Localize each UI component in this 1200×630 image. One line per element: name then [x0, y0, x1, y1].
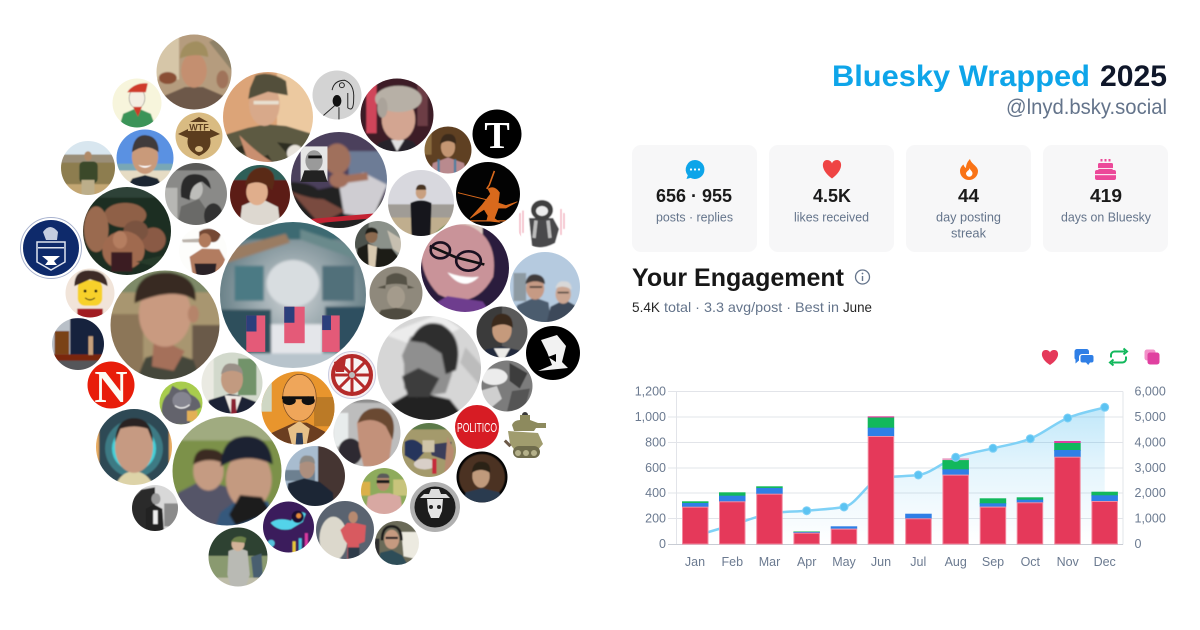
- avatar: person in hat outdoors: [208, 528, 268, 586]
- month labels: [685, 555, 1116, 569]
- panel: streak stat: day posting: [936, 210, 1001, 224]
- avatar: cartoon man with sunglasses: [262, 372, 334, 444]
- month labels: Jun: [871, 555, 891, 569]
- avatar: man in white collared shirt: [476, 306, 528, 358]
- avatar: red wheel emblem: [328, 352, 376, 398]
- panel: likes stat: [769, 145, 894, 252]
- panel: likes stat: 4.5K: [813, 186, 851, 206]
- avatar: man in red t-shirt: [316, 501, 374, 559]
- engagement summary: June: [843, 299, 872, 315]
- panel: streak stat: [906, 145, 1031, 252]
- avatar: pirate ship logo: [526, 326, 580, 380]
- left axis labels: 600: [645, 461, 666, 475]
- engagement chart: [635, 384, 1166, 569]
- panel: days on Bluesky stat: 419: [1090, 186, 1122, 206]
- avatar: red N logo: N: [94, 361, 128, 412]
- avatar: smiling bald man with glasses: [421, 224, 509, 312]
- engagement summary: total · 3.3 avg/post · Best in: [664, 299, 839, 315]
- icon: replies legend bubbles: [1074, 349, 1094, 365]
- left axis labels: 200: [645, 512, 666, 526]
- cumulative area and line: [695, 403, 1109, 544]
- icon: quotes legend squares: [1144, 350, 1160, 364]
- panel: posts and replies stat: 656 · 955: [656, 186, 732, 206]
- month labels: Apr: [797, 555, 816, 569]
- panel: days on Bluesky stat: [1043, 145, 1168, 252]
- icon: heart: [823, 160, 841, 178]
- avatar: stylised portrait with cyan halo: [96, 409, 172, 485]
- month labels: Jul: [910, 555, 926, 569]
- title: 2025: [1100, 60, 1167, 93]
- panel: days on Bluesky stat: days on Bluesky: [1061, 210, 1151, 224]
- panel: streak stat: 44: [958, 186, 979, 206]
- engagement summary: 5.4K: [632, 299, 661, 315]
- avatar: man in dark coat: [355, 221, 401, 267]
- avatar: father and son selfie: [172, 416, 282, 526]
- avatar: WTF smokey bear badge: [176, 112, 222, 160]
- avatar: pilot with headset: [375, 521, 419, 565]
- left axis labels: 400: [645, 486, 666, 500]
- left axis labels: 1,200: [635, 384, 666, 398]
- avatar: aircraft interior with flags: [220, 222, 366, 368]
- month labels: Feb: [722, 555, 743, 569]
- avatar: man in camouflage: [223, 72, 313, 162]
- avatar: monochrome woman in plaid: [165, 163, 227, 225]
- right axis labels: [1134, 384, 1166, 551]
- month labels: May: [832, 555, 857, 569]
- avatar: close-up selfie by window: [334, 400, 400, 466]
- avatar: hand-drawn face sketch: [312, 70, 362, 120]
- icon: speech bubble: [686, 160, 704, 179]
- avatar: sepia man in campaign hat: [370, 266, 422, 320]
- right axis labels: 2,000: [1134, 486, 1166, 500]
- avatar: New York Times logo: [472, 110, 522, 158]
- icon: flame: [960, 159, 978, 180]
- right axis labels: 6,000: [1134, 384, 1166, 398]
- avatar bubble cluster: [20, 27, 587, 592]
- avatar: toddler portrait: [230, 165, 290, 225]
- avatar: man in landscape: [61, 141, 115, 195]
- stacked monthly bars: [682, 416, 1118, 544]
- avatar: neon twitter bird: [263, 502, 314, 552]
- avatar: WTF smokey bear badge: WTF: [189, 122, 209, 132]
- avatar: woman in black top: [182, 228, 226, 275]
- avatar: grey cat on green: [160, 382, 202, 424]
- right axis labels: 0: [1134, 537, 1142, 551]
- avatar: man in plaid shirt: [424, 126, 472, 174]
- avatar: white haired man on TV: [360, 78, 434, 152]
- avatar: monochrome man small: [132, 485, 178, 531]
- avatar: POLITICO logo: POLITICO: [457, 421, 497, 435]
- title: Bluesky Wrapped: [832, 60, 1090, 93]
- dot: August cumulative marker: [952, 453, 960, 461]
- month labels: Jan: [685, 555, 705, 569]
- avatar: monochrome bearded profile: [377, 316, 481, 420]
- avatar: sketch figure with pink strokes: [518, 199, 566, 248]
- avatar: young man looking up: [110, 270, 220, 380]
- avatar: cartoon general: [112, 78, 162, 128]
- avatar: galley rowers: [83, 187, 171, 275]
- avatar: New York Times logo: T: [484, 115, 510, 157]
- right axis labels: 5,000: [1134, 410, 1166, 424]
- avatar: POLITICO logo: [455, 405, 499, 449]
- avatar: rugby scrum: [402, 423, 456, 477]
- avatar: two men under grey sky: [510, 252, 580, 322]
- panel: streak stat: streak: [951, 226, 986, 240]
- right axis labels: 3,000: [1134, 461, 1166, 475]
- avatar: skull and hat patch: [410, 482, 460, 532]
- icon: likes legend heart: [1042, 350, 1058, 365]
- left axis labels: 0: [659, 537, 666, 551]
- month labels: Mar: [759, 555, 780, 569]
- right axis labels: 4,000: [1134, 436, 1166, 450]
- avatar: soldier in tan cap: [156, 34, 232, 110]
- left axis labels: 800: [645, 436, 666, 450]
- avatar: monochrome textured sketch: [482, 360, 532, 412]
- panel: likes stat: likes received: [794, 210, 869, 224]
- avatar: man in suit on the shore: [388, 170, 454, 236]
- panel: posts and replies stat: posts · replies: [656, 210, 733, 224]
- month labels: Sep: [982, 555, 1004, 569]
- icon: reposts legend arrows: [1110, 348, 1127, 366]
- panel: posts and replies stat: [632, 145, 757, 252]
- avatar: Greek vase figure: [456, 162, 520, 226]
- chart legend: [1042, 348, 1160, 366]
- heading: your engagement: Your Engagement: [632, 264, 845, 292]
- avatar: older man in suit: [202, 352, 262, 414]
- handle: @lnyd.bsky.social: [1006, 96, 1167, 119]
- avatar: wrestling scene with old photo: [291, 132, 387, 228]
- avatar: eagle and anvil crest: [20, 218, 82, 278]
- avatar: lego minifigure: [66, 268, 114, 318]
- avatar: man on dark ring background: [456, 452, 508, 502]
- avatar: tiny cartoon tank: [504, 412, 546, 458]
- left axis labels: [635, 384, 666, 551]
- right axis labels: 1,000: [1134, 512, 1166, 526]
- avatar: speaker on stage: [52, 318, 104, 370]
- avatar: man with sunglasses outdoors: [361, 468, 407, 514]
- icon: birthday cake: [1095, 159, 1116, 180]
- avatar: diver at beach: [116, 130, 174, 186]
- month labels: Nov: [1057, 555, 1080, 569]
- icon: info: [856, 270, 870, 284]
- month labels: Dec: [1094, 555, 1116, 569]
- left axis labels: 1,000: [635, 410, 666, 424]
- month labels: Oct: [1021, 555, 1041, 569]
- avatar: man in navy pea coat: [285, 446, 345, 506]
- month labels: Aug: [945, 555, 967, 569]
